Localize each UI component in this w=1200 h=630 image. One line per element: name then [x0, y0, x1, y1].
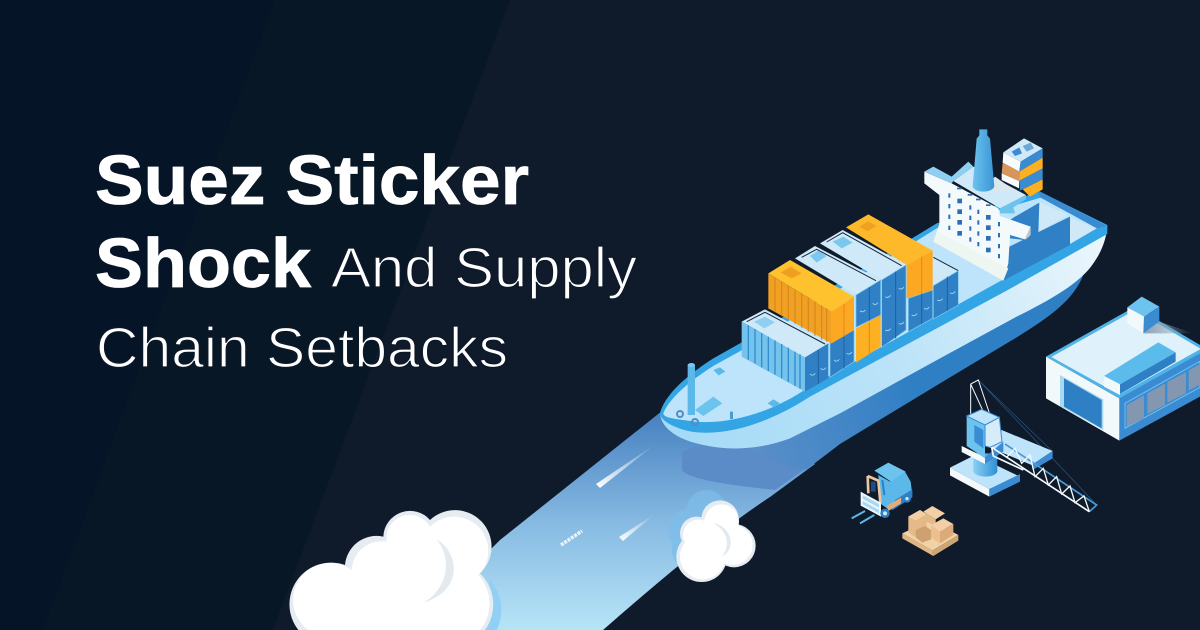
hull side: [660, 227, 1107, 448]
second container: [795, 246, 881, 327]
superstructure: [924, 129, 1070, 281]
cargo boxes on pallet: [902, 506, 958, 556]
forklift counterweight: [887, 498, 901, 511]
blue front container: [742, 309, 828, 392]
cloud rim: [289, 510, 493, 630]
warehouse: [1046, 297, 1200, 441]
forklift cab roof: [874, 463, 906, 482]
warehouse door: [1060, 375, 1103, 430]
wake behind ship: [420, 400, 815, 630]
title line 1: Suez Sticker: [95, 141, 529, 219]
ship: [660, 129, 1107, 469]
funnel: [973, 129, 994, 192]
door handle marks: [810, 287, 955, 375]
wake streak 1: [596, 443, 657, 488]
forks: [852, 511, 874, 523]
rear containers: [908, 257, 958, 332]
boxes: [908, 510, 927, 537]
striped stack: [1002, 138, 1043, 197]
stern interior: [1038, 191, 1107, 244]
deck: [663, 197, 1097, 422]
large cloud: [289, 510, 501, 630]
forklift wheels: [880, 509, 890, 518]
orange lower container: [830, 315, 881, 377]
title line 2 bold: Shock: [95, 224, 311, 302]
cloud crease: [423, 539, 454, 603]
bow fittings: [677, 363, 780, 425]
orange front container: [768, 260, 854, 343]
blue stern block: [1010, 203, 1039, 240]
deck rim: [660, 192, 1107, 433]
crane boom: [992, 444, 1097, 512]
small cloud crease: [713, 523, 731, 557]
crane mast: [971, 380, 990, 415]
warehouse roof: [1046, 307, 1200, 398]
windows: [948, 188, 1000, 258]
warehouse windows: [1125, 361, 1200, 428]
forklift carriage: [862, 493, 880, 515]
roof vent: [1104, 342, 1176, 395]
hull shadow on water: [682, 444, 815, 490]
warehouse right wall: [1119, 350, 1200, 441]
forklift mast: [868, 476, 880, 503]
crane cables: [978, 380, 1097, 505]
wake streak 2: [619, 514, 655, 541]
cloud body: [293, 515, 490, 630]
title line 3: Chain Setbacks: [96, 316, 508, 380]
crane base: [950, 455, 1020, 497]
title: [95, 141, 638, 380]
third container: [820, 230, 907, 347]
bridge wing: [924, 162, 973, 183]
warehouse left wall: [1046, 357, 1119, 441]
forklift: [852, 463, 912, 523]
crane cab: [967, 409, 1002, 458]
crane column: [973, 453, 997, 477]
crane platform: [962, 430, 1053, 470]
wake ripple: [561, 531, 582, 545]
roof box shadow: [1143, 322, 1193, 333]
orange top container: [846, 214, 933, 298]
small cloud: [668, 490, 756, 582]
dock crane: [950, 380, 1097, 512]
white tower: [924, 172, 1031, 281]
title line 2 light: And Supply: [331, 236, 638, 300]
hull underside: [750, 273, 1084, 469]
forklift body: [878, 472, 912, 509]
pallet: [902, 520, 958, 551]
roof box: [1127, 297, 1159, 333]
